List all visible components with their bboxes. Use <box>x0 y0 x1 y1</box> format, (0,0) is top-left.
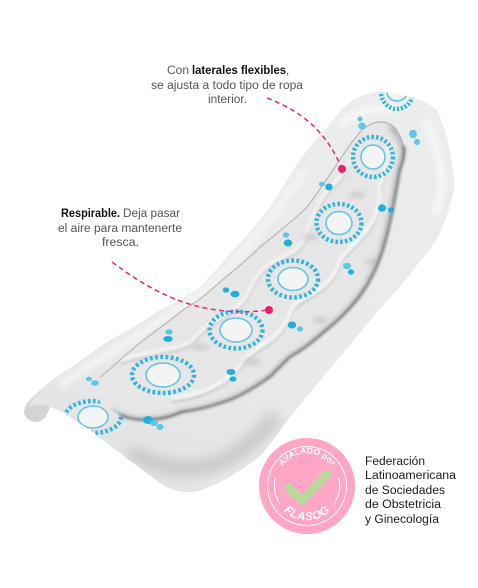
badge text: avalado por: AVALADO por <box>280 448 335 466</box>
badge: avalado por FLASOG <box>259 438 355 534</box>
text: laterales flexibles: , <box>286 65 289 77</box>
core: embossed highlights <box>120 160 350 360</box>
text: federacion: Federación <box>365 456 425 468</box>
badge text: FLASOG: FLASOG <box>284 506 329 520</box>
text: federacion: de Sociedades <box>365 485 445 497</box>
text: federacion: y Ginecología <box>365 514 440 526</box>
text: laterales flexibles: se ajusta a todo tipo de ropa <box>151 80 304 92</box>
text: respirable: fresca. <box>102 237 139 249</box>
motif: flower 1 <box>353 137 393 177</box>
motif: flower 2 <box>316 204 362 242</box>
text: respirable: Respirable. <box>61 208 120 220</box>
motif: flower 3 <box>268 260 318 298</box>
text: federacion <box>365 456 457 526</box>
motif: flower 5 <box>132 357 194 393</box>
pad: outer body <box>27 92 454 492</box>
text: respirable: el aire para mantenerte <box>58 223 182 235</box>
callout: leader line respirable <box>112 262 273 314</box>
pad: curl front <box>24 405 50 422</box>
motif: flower 4 <box>210 312 262 348</box>
core: embossed shadows <box>120 164 350 364</box>
text: respirable: Deja pasar <box>123 208 180 220</box>
core: embossed dimples <box>191 192 379 365</box>
pad: shading <box>60 75 442 491</box>
text: federacion: Latinoamericana <box>365 470 457 482</box>
motif: blue dots <box>86 116 420 430</box>
core: soft edge shade <box>110 126 404 421</box>
text: laterales flexibles <box>151 65 304 106</box>
motif: corner flower top <box>378 92 414 112</box>
core: darker lower-right edge <box>120 146 404 420</box>
core: top seam line <box>100 122 397 377</box>
text: federacion: de Obstetricia <box>365 499 442 511</box>
pad: curled tip <box>24 370 78 422</box>
text: laterales flexibles: Con <box>167 65 189 77</box>
text: laterales flexibles: interior. <box>208 94 247 106</box>
icon: check mark <box>289 474 327 501</box>
motif: corner flower bottom <box>65 401 121 433</box>
text: respirable <box>58 208 182 249</box>
text: laterales flexibles: laterales flexibles <box>192 65 286 77</box>
pad: inner absorbent core <box>90 115 410 425</box>
callout: leader line lateral <box>267 98 346 173</box>
product: sanitary pad <box>24 75 454 492</box>
